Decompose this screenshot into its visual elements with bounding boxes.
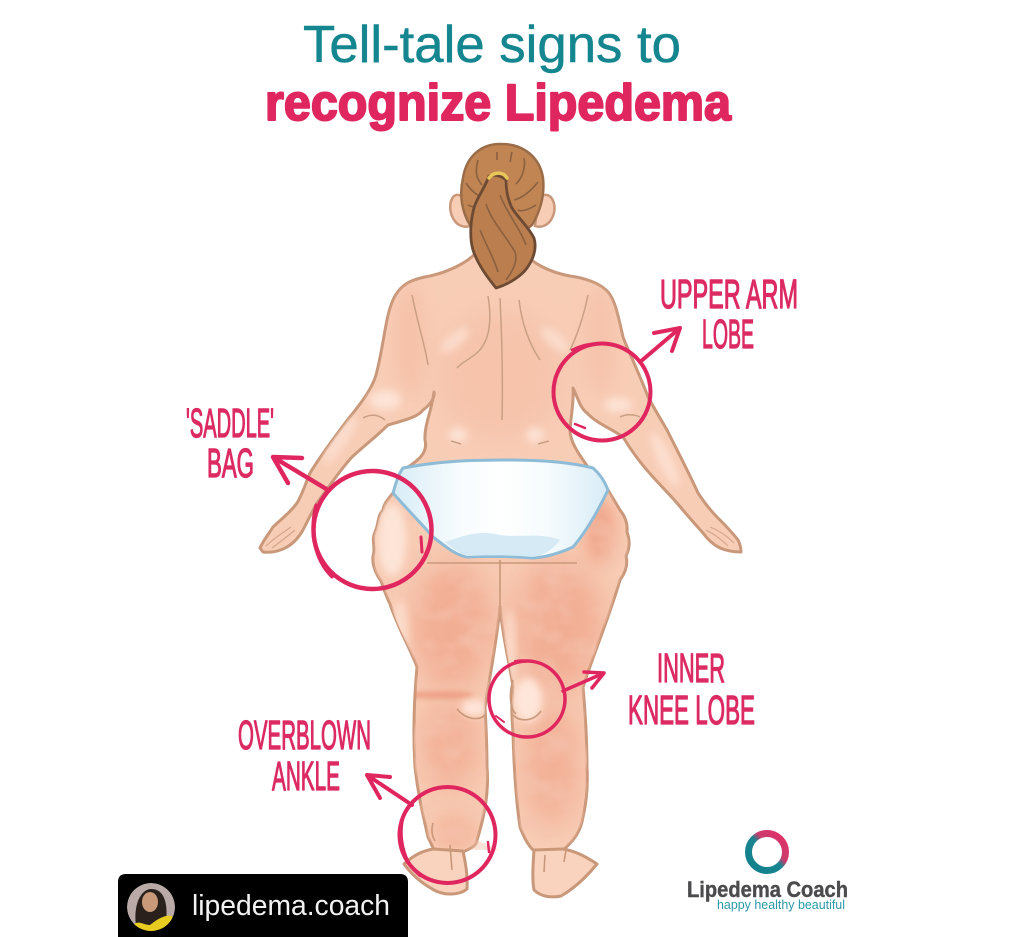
underwear	[393, 460, 608, 558]
hair and ponytail	[461, 144, 543, 288]
infographic canvas	[118, 24, 847, 937]
label: saddle bag: BAG	[207, 440, 254, 486]
marker: saddle bag	[273, 457, 432, 589]
infographic canvas: 'SADDLE'	[186, 400, 274, 446]
label: overblown ankle	[238, 712, 371, 799]
label: upper arm lobe: UPPER ARM	[660, 271, 798, 317]
label: inner knee lobe: INNER	[657, 645, 725, 691]
arrow: upper arm	[640, 328, 680, 362]
arrow: inner knee	[563, 672, 604, 691]
left foot	[404, 849, 467, 894]
badge: lipedema.coach account: lipedema.coach	[192, 890, 390, 922]
marker: inner knee lobe	[489, 660, 604, 737]
label: upper arm lobe: LOBE	[702, 311, 754, 357]
logo: Lipedema Coach: happy healthy beautiful	[717, 898, 845, 912]
title: recognize Lipedema	[265, 74, 732, 131]
logo: Lipedema Coach: Lipedema Coach	[687, 877, 848, 902]
title	[265, 16, 732, 131]
leg creases	[427, 560, 577, 872]
label: inner knee lobe	[628, 645, 755, 733]
marker: overblown ankle	[367, 775, 496, 883]
neck	[472, 225, 530, 262]
arrow: overblown ankle	[367, 775, 412, 805]
hair band	[489, 173, 507, 178]
avatar	[127, 883, 176, 935]
label: upper arm lobe	[660, 271, 798, 357]
title: Tell-tale signs to	[303, 16, 681, 74]
badge: lipedema.coach account	[118, 874, 408, 937]
right foot	[533, 849, 597, 897]
logo ring	[748, 834, 786, 870]
marker: upper arm lobe	[554, 328, 680, 440]
finger lines	[266, 527, 734, 548]
arrow: saddle bag	[273, 457, 328, 490]
label: inner knee lobe: KNEE LOBE	[628, 687, 755, 733]
label: saddle bag	[186, 400, 274, 486]
illustration: woman from behind	[260, 144, 741, 897]
upper body and arms	[260, 250, 741, 552]
ears	[450, 195, 555, 227]
logo: Lipedema Coach	[687, 834, 848, 912]
legs	[370, 490, 630, 897]
infographic canvas: OVERBLOWN	[238, 712, 371, 758]
back muscle lines	[363, 295, 678, 505]
label: overblown ankle: ANKLE	[272, 753, 340, 799]
